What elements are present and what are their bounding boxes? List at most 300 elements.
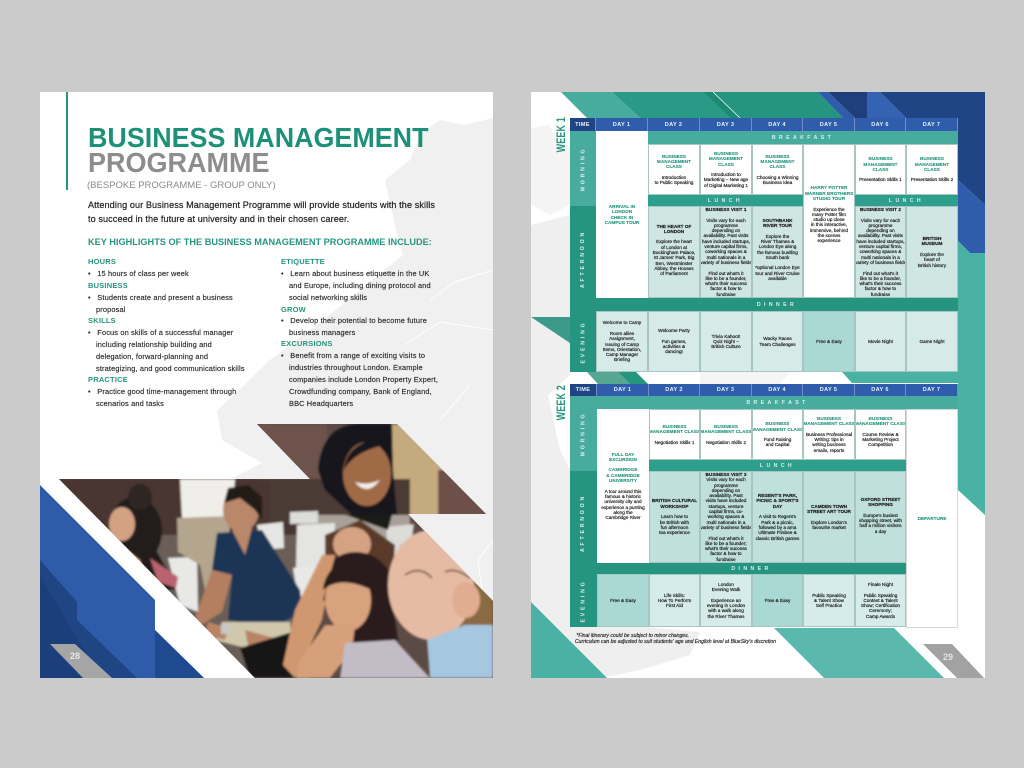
standing person — [180, 479, 235, 518]
day 5 evening — [803, 574, 855, 627]
day 4 afternoon: followed by a ama — [759, 525, 796, 530]
day 2 evening — [648, 311, 700, 372]
day 6 afternoon: have included startups, — [856, 239, 905, 244]
day 3 afternoon: what's their success — [705, 281, 747, 286]
day 1 evening: Assignment, — [609, 336, 635, 341]
day 1 arrival: CAMPUS TOUR — [605, 220, 639, 225]
right column highlights — [281, 257, 438, 408]
day 1 cambridge excursion: & CAMBRIDGE — [606, 473, 640, 478]
day 6 afternoon: factor & how to — [865, 286, 896, 291]
footnote — [575, 632, 776, 645]
day 5 harry potter tour: the scenes — [818, 233, 840, 238]
day 6 evening: Finale Night — [868, 582, 893, 587]
day 3 afternoon: availability. Past — [709, 493, 743, 498]
day 7 evening: Game Night — [919, 339, 944, 344]
day 6 afternoon: depending on — [866, 228, 895, 233]
day 4 afternoon: SOUTHBANK — [763, 218, 792, 223]
day 6 evening — [855, 311, 906, 372]
day 5 morning: BUSINESS — [817, 416, 841, 421]
day 6 morning — [855, 409, 906, 460]
lunch bar right: LUNCH — [889, 198, 924, 204]
background map — [531, 104, 790, 678]
day 6 evening: Ceremony; — [869, 608, 892, 613]
right column highlights: and Europe, including dining protocol and — [289, 281, 431, 290]
day 3 afternoon: variety of business fields — [700, 525, 752, 530]
day 1 arrival: ARRIVAL IN — [609, 204, 635, 209]
side label: afternoon — [570, 471, 597, 574]
day 1 cambridge excursion: UNIVERSITY — [609, 478, 637, 483]
left column highlights: scenarios and tasks — [96, 399, 164, 408]
day 6 morning: Course Review & — [862, 432, 899, 436]
day 1 evening: Free & Easy — [610, 598, 636, 603]
day 4 afternoon: Explore the — [766, 234, 789, 239]
day 6 evening: Contest & Talent — [863, 598, 898, 603]
dinner bar — [597, 563, 906, 574]
day 5 afternoon: favourite market — [812, 525, 846, 530]
day 1 cambridge excursion: university city and — [604, 499, 642, 504]
day headers: DAY 2 — [665, 387, 683, 393]
day 3 evening: with a walk along — [708, 608, 744, 613]
day 6 morning: CLASS — [873, 167, 888, 172]
side label: evening: EVENING — [581, 579, 587, 622]
day 3 afternoon: Find out what's it — [708, 271, 744, 276]
side label: morning — [570, 396, 597, 471]
day 2 morning: MANAGEMENT — [657, 159, 691, 164]
day 7 departure: DEPARTURE — [918, 516, 946, 521]
day 3 morning: MANAGEMENT CLASS — [700, 429, 752, 434]
right column highlights: • Learn about business etiquette in the UK — [281, 269, 429, 278]
day 3 afternoon: factor & how to — [710, 286, 742, 291]
breakfast bar: BREAKFAST — [772, 134, 834, 140]
right column highlights: ETIQUETTE — [281, 257, 325, 266]
left column highlights: including relationship building and — [96, 340, 212, 349]
day 6 afternoon: like to be a founder, — [860, 276, 901, 281]
day 3 afternoon: availability. Past visits — [704, 233, 748, 238]
right column highlights: BBC Headquarters — [289, 399, 353, 408]
day 3 morning: BUSINESS — [714, 151, 738, 156]
right column highlights: social networking skills — [289, 293, 367, 302]
shape: blue diagonal block — [40, 485, 204, 678]
day 3 afternoon: depending on — [712, 228, 740, 233]
day 5 harry potter tour: immersive, behind — [810, 228, 848, 233]
day 4 morning: MANAGEMENT — [760, 159, 795, 164]
day 5 morning: writing business — [812, 442, 846, 447]
day 4 evening — [752, 311, 803, 372]
day 6 afternoon — [855, 206, 906, 298]
left column highlights: SKILLS — [88, 316, 116, 325]
top band: blue — [818, 92, 985, 253]
day 6 evening: Show; Certification — [861, 603, 900, 608]
day 4 morning: BUSINESS — [766, 154, 789, 159]
day 3 morning — [700, 409, 752, 460]
day 2 evening: dancing! — [665, 349, 683, 354]
day 2 evening: activities & — [663, 344, 685, 349]
day 3 morning: CLASS — [718, 162, 734, 167]
day headers: DAY 2 — [665, 122, 682, 128]
day 2 afternoon: WORKSHOP — [660, 504, 689, 509]
side label: afternoon: AFTERNOON — [580, 229, 586, 288]
day 1 evening: Welcome to Camp — [603, 320, 641, 325]
day 6 morning: Marketing Project — [862, 437, 899, 442]
intro paragraph: Attending our Business Management Programme will provide students with the skills — [88, 200, 435, 210]
left page artwork: blue shapes and photo collage — [40, 424, 493, 678]
day headers: DAY 5 — [820, 122, 837, 128]
right column highlights: industries throughout London. Example — [289, 363, 423, 372]
breakfast bar — [648, 131, 958, 144]
day 2 evening: Fun games, — [662, 339, 686, 344]
day headers — [597, 384, 958, 396]
left column highlights — [88, 257, 245, 408]
day headers: DAY 1 — [614, 387, 631, 393]
day 1 arrival: LONDON — [612, 209, 632, 214]
day 6 afternoon: what's their success — [860, 281, 901, 286]
day 6 afternoon: shopping street, with — [859, 518, 902, 523]
center girl — [322, 550, 399, 643]
day 4 morning — [752, 144, 803, 195]
day 1 evening — [597, 574, 649, 627]
day 3 evening: Experience an — [711, 598, 741, 603]
day 7 evening — [906, 311, 958, 372]
day 3 afternoon: like to be a founder; — [705, 541, 747, 546]
day 3 morning: MANAGEMENT — [709, 156, 743, 161]
intro paragraph — [88, 200, 435, 224]
day 3 afternoon: programme — [714, 483, 738, 488]
title: PROGRAMME — [88, 147, 270, 178]
day 3 evening: London — [718, 582, 734, 587]
footnote: *Final itinerary could be subject to minor changes. — [576, 633, 689, 639]
day headers: DAY 6 — [871, 122, 889, 128]
day 5 evening: Public Speaking — [812, 593, 846, 598]
day 3 afternoon: multi nationals in a — [707, 255, 745, 260]
title — [88, 122, 429, 178]
day 6 afternoon: Europe's busiest — [863, 513, 898, 518]
day 4 morning: and Capital — [766, 442, 789, 447]
day 5 afternoon — [803, 471, 855, 563]
day 2 afternoon: tea experience — [659, 530, 690, 535]
lunch bar — [649, 460, 906, 471]
day 7 afternoon: Explore the — [920, 252, 944, 257]
day 6 afternoon: OXFORD STREET — [861, 497, 900, 502]
day 5 morning: Writing: tips in — [814, 437, 844, 442]
blonde girl — [400, 544, 493, 628]
day 7 departure — [906, 409, 958, 628]
day 2 afternoon — [649, 471, 700, 563]
day 4 afternoon: tour and River Cruise — [755, 271, 800, 276]
day 5 harry potter tour: STUDIO TOUR — [813, 196, 845, 201]
lunch bar right — [855, 195, 958, 206]
panel: right page — [531, 92, 985, 678]
photo: students collage — [40, 424, 493, 680]
day 2 afternoon: Abbey, the Houses — [654, 266, 694, 271]
day 3 evening — [700, 574, 752, 627]
day 4 evening — [752, 574, 803, 627]
day 7 afternoon — [906, 206, 958, 298]
day 4 afternoon: *optional London Eye — [755, 265, 800, 270]
left column highlights: • 15 hours of class per week — [88, 269, 189, 278]
day 3 afternoon: working spaces & — [708, 514, 744, 519]
day 3 afternoon: startups, venture — [709, 504, 743, 509]
day 2 evening: First Aid — [666, 603, 683, 608]
day 5 harry potter tour: HARRY POTTER — [811, 185, 847, 190]
day 3 afternoon: venture capital firms, — [704, 244, 748, 249]
day 1 cambridge excursion: FULL DAY — [612, 452, 634, 457]
day headers: DAY 4 — [768, 387, 786, 393]
day 2 morning: CLASS — [666, 164, 682, 169]
day 2 afternoon: Learn how to — [661, 514, 688, 519]
day 2 afternoon: THE HEART OF — [657, 224, 691, 229]
left column highlights: delegation, forward-planning and — [96, 352, 208, 361]
day 2 afternoon: of Parliament — [660, 271, 688, 276]
day headers: DAY 4 — [768, 122, 786, 128]
day 3 afternoon — [700, 206, 752, 298]
day 6 afternoon: coworking spaces & — [860, 249, 901, 254]
day 4 afternoon: RIVER TOUR — [763, 223, 792, 228]
breakfast bar: BREAKFAST — [746, 400, 809, 406]
black shorts — [240, 632, 296, 678]
lunch bar left — [648, 195, 803, 206]
day 3 afternoon: Visits vary for each — [706, 218, 746, 223]
day 7 morning: BUSINESS — [920, 156, 944, 161]
day 6 morning: BUSINESS — [868, 156, 892, 161]
day 7 morning: CLASS — [924, 167, 940, 172]
day 4 afternoon: the famous bustling — [757, 250, 798, 254]
day 1 evening: Camp Manager — [606, 352, 638, 357]
day 5 morning: emails, reports — [814, 448, 844, 453]
right band: teal — [842, 241, 985, 515]
day 3 afternoon: programme — [714, 223, 738, 228]
day headers: DAY 3 — [717, 122, 734, 128]
day 3 afternoon: variety of business fields — [700, 260, 752, 265]
day 4 morning: CLASS — [770, 164, 785, 169]
breakfast bar — [597, 396, 958, 409]
day 4 afternoon: River Thames & — [761, 239, 794, 244]
day 1 cambridge excursion: A tour around this — [605, 489, 641, 494]
day 7 afternoon: heart of — [924, 257, 940, 262]
woman behind — [324, 518, 396, 574]
day 4 afternoon: REGENT'S PARK, — [758, 493, 797, 498]
background map — [217, 118, 493, 600]
left column highlights: PRACTICE — [88, 375, 128, 384]
day 2 afternoon: Buckingham Palace, — [653, 250, 695, 255]
top band: teal — [561, 92, 843, 118]
dinner bar: DINNER — [757, 302, 797, 308]
day 4 morning: MANAGEMENT CLASS — [752, 427, 803, 432]
week 2 label: WEEK 2 — [556, 385, 568, 420]
day 6 afternoon: variety of business fields — [855, 260, 906, 265]
day 4 morning: Choosing a Winning — [757, 175, 798, 180]
week 1 label: WEEK 1 — [556, 117, 568, 152]
day 3 morning: of Digital Marketing 1 — [704, 183, 748, 188]
key highlights heading: KEY HIGHLIGHTS OF THE BUSINESS MANAGEMENT PROGRAMME INCLUDE: — [88, 237, 432, 247]
side label: afternoon — [570, 206, 596, 311]
day 3 afternoon: BUSINESS VISIT 3 — [706, 472, 746, 477]
day headers: DAY 1 — [613, 122, 630, 128]
right column highlights: • Develop their potential to become future — [281, 316, 427, 325]
day 3 afternoon: have included startups, — [702, 239, 750, 244]
day 4 afternoon — [752, 471, 803, 563]
day 5 evening: Self Practice — [816, 603, 842, 608]
page number tag: 29: 29 — [943, 652, 953, 662]
day 3 afternoon: what's their success — [705, 546, 747, 551]
day 1 arrival — [596, 131, 648, 298]
day 2 evening: Welcome Party — [658, 328, 690, 333]
day 3 afternoon: Find out what's it — [708, 536, 744, 541]
day 7 morning: MANAGEMENT — [915, 162, 949, 167]
day 6 morning: BUSINESS — [869, 416, 892, 421]
day headers: DAY 5 — [820, 387, 837, 393]
day 5 evening: Free & Easy — [816, 339, 842, 344]
day 4 afternoon: South bank — [766, 255, 789, 260]
day headers: DAY 3 — [717, 387, 734, 393]
subtitle: (BESPOKE PROGRAMME - GROUP ONLY) — [87, 180, 276, 191]
day 6 morning: MANAGEMENT CLASS — [855, 421, 906, 426]
day 5 harry potter tour: studio up close — [813, 217, 845, 222]
lunch bar left: LUNCH — [708, 198, 743, 204]
day 3 afternoon: Visits vary for each — [706, 477, 746, 482]
day 6 afternoon: programme — [869, 223, 892, 228]
day 2 afternoon: LONDON — [664, 229, 684, 234]
day 3 afternoon: factor & how to — [710, 551, 742, 556]
day 6 evening — [855, 574, 906, 627]
day 2 afternoon — [648, 206, 700, 298]
day 2 afternoon: Ben, Westminster — [656, 261, 692, 266]
left column highlights: BUSINESS — [88, 281, 128, 290]
day 7 afternoon: MUSEUM — [922, 241, 942, 246]
day 5 afternoon: Explore London's — [811, 520, 847, 525]
panel: left page — [40, 92, 493, 678]
left column highlights: HOURS — [88, 257, 116, 266]
side label: evening: EVENING — [580, 320, 586, 363]
day 2 afternoon: of London at — [661, 245, 687, 250]
day 2 evening: Life Skills: — [664, 593, 685, 598]
left column highlights: • Practice good time-management through — [88, 387, 236, 396]
day 2 morning: to Public Speaking — [655, 180, 693, 185]
day 5 harry potter tour: experience — [818, 238, 840, 243]
day 3 morning: Marketing – New age — [704, 177, 748, 182]
day 6 afternoon — [855, 471, 906, 563]
left column highlights: • Focus on skills of a successful manager — [88, 328, 233, 337]
day 2 evening: How To Perform — [658, 598, 691, 603]
day 6 evening: Camp Awards — [866, 614, 895, 619]
day headers — [596, 118, 958, 131]
day 6 afternoon: a day — [875, 529, 886, 534]
day 7 morning — [906, 144, 958, 195]
right column highlights: • Benefit from a range of exciting visits to — [281, 351, 425, 360]
side label: evening — [570, 311, 596, 372]
day 2 morning: Negotiation Skills 1 — [655, 440, 694, 445]
footnote: Curriculum can be adjusted to suit students' age and English level at BlueSky's discretion — [575, 639, 776, 645]
day 4 afternoon: A visit to Regent's — [759, 514, 796, 519]
day 3 evening: the River Thames — [708, 614, 744, 619]
day 3 evening: Trivia Kahoot! — [712, 334, 740, 339]
page number tag: 28: 28 — [70, 651, 80, 661]
day 3 afternoon: coworking spaces & — [705, 249, 747, 254]
day 4 afternoon: classic British games — [756, 536, 799, 541]
day 3 morning: Introduction to — [711, 172, 741, 177]
day 3 afternoon: like to be a founder, — [706, 276, 746, 281]
day 4 morning: BUSINESS — [766, 421, 789, 426]
day 5 morning — [803, 409, 855, 460]
day 2 morning — [649, 409, 700, 460]
day 3 afternoon: depending on — [712, 488, 740, 493]
right column highlights: EXCURSIONS — [281, 339, 333, 348]
day 6 afternoon: venture capital firms, — [859, 244, 902, 249]
day 2 afternoon: Explore the heart — [656, 239, 692, 244]
day 3 evening: British Culture — [711, 344, 741, 349]
day 6 afternoon: half a million visitors — [860, 523, 901, 528]
day 3 afternoon: BUSINESS VISIT 1 — [706, 207, 746, 212]
day 6 morning: MANAGEMENT — [863, 162, 898, 167]
right column highlights: GROW — [281, 305, 306, 314]
day 4 morning: Business Idea — [763, 180, 792, 185]
day 1 cambridge excursion: along the — [613, 510, 633, 515]
day 2 morning: MANAGEMENT CLASS — [649, 429, 700, 434]
day 2 afternoon: BRITISH CULTURAL — [652, 498, 697, 503]
day 1 arrival: CHECK IN — [611, 214, 633, 220]
day 5 afternoon: STREET ART TOUR — [807, 509, 851, 514]
day 4 morning — [752, 409, 803, 460]
day 1 evening — [596, 311, 648, 372]
day 6 evening: Public Speaking — [864, 593, 897, 598]
time header: TIME — [575, 122, 590, 128]
day 2 morning — [648, 144, 700, 195]
day 3 evening: Quiz Night – — [713, 339, 739, 344]
hair of man behind — [346, 515, 392, 530]
day 2 evening — [649, 574, 700, 627]
time header — [570, 384, 597, 396]
day 5 evening: & Talent Show — [814, 598, 844, 603]
day 6 afternoon: multi nationals in a — [861, 255, 900, 260]
side label: morning: MORNING — [581, 411, 587, 456]
bottom teal trapezoid — [774, 628, 944, 678]
day 5 evening — [803, 311, 855, 372]
day 2 morning: Introduction — [662, 175, 686, 180]
day 1 cambridge excursion — [597, 409, 649, 563]
left column highlights: • Students create and present a business — [88, 293, 233, 302]
day 4 afternoon: available — [768, 276, 787, 281]
dinner bar: DINNER — [731, 566, 772, 572]
day 6 afternoon: Find out what's it — [863, 271, 898, 276]
left column highlights: strategizing, and good communication skills — [96, 364, 245, 373]
day 3 afternoon — [700, 471, 752, 563]
day 6 morning — [855, 144, 906, 195]
intro paragraph: to succeed in the future at university and in their chosen career. — [88, 214, 349, 224]
day 4 afternoon: Park & a picnic, — [761, 520, 794, 525]
day 3 afternoon: capital firms, co- — [709, 509, 743, 514]
day 7 afternoon: British history — [918, 263, 946, 268]
day 4 afternoon — [752, 206, 803, 298]
day 3 morning: Negotiation Skills 2 — [706, 440, 746, 445]
day 6 evening: Movie Night — [868, 339, 893, 344]
day 4 evening: Wacky Races — [763, 336, 792, 341]
day 1 cambridge excursion: famous & historic — [605, 494, 641, 499]
upper hijab — [318, 424, 397, 515]
day 3 evening — [700, 311, 752, 372]
day 2 afternoon: St James' Park, Big — [654, 255, 694, 260]
side label: morning — [570, 131, 596, 206]
day 6 afternoon: Visits vary for each — [861, 218, 900, 223]
woman with curls — [108, 498, 163, 552]
day 4 morning: Fund Raising — [764, 437, 791, 442]
chairs — [168, 557, 198, 612]
page number tag: 29 — [923, 644, 984, 678]
title: BUSINESS MANAGEMENT — [88, 122, 429, 153]
day 4 afternoon: London Eye along — [759, 244, 796, 249]
day 6 afternoon: fundraise — [871, 292, 890, 297]
day 1 evening: Items, Orientation, — [603, 347, 641, 352]
day 7 morning: Presentation Skills 2 — [911, 177, 953, 182]
day 3 afternoon: fundraise — [716, 557, 736, 562]
